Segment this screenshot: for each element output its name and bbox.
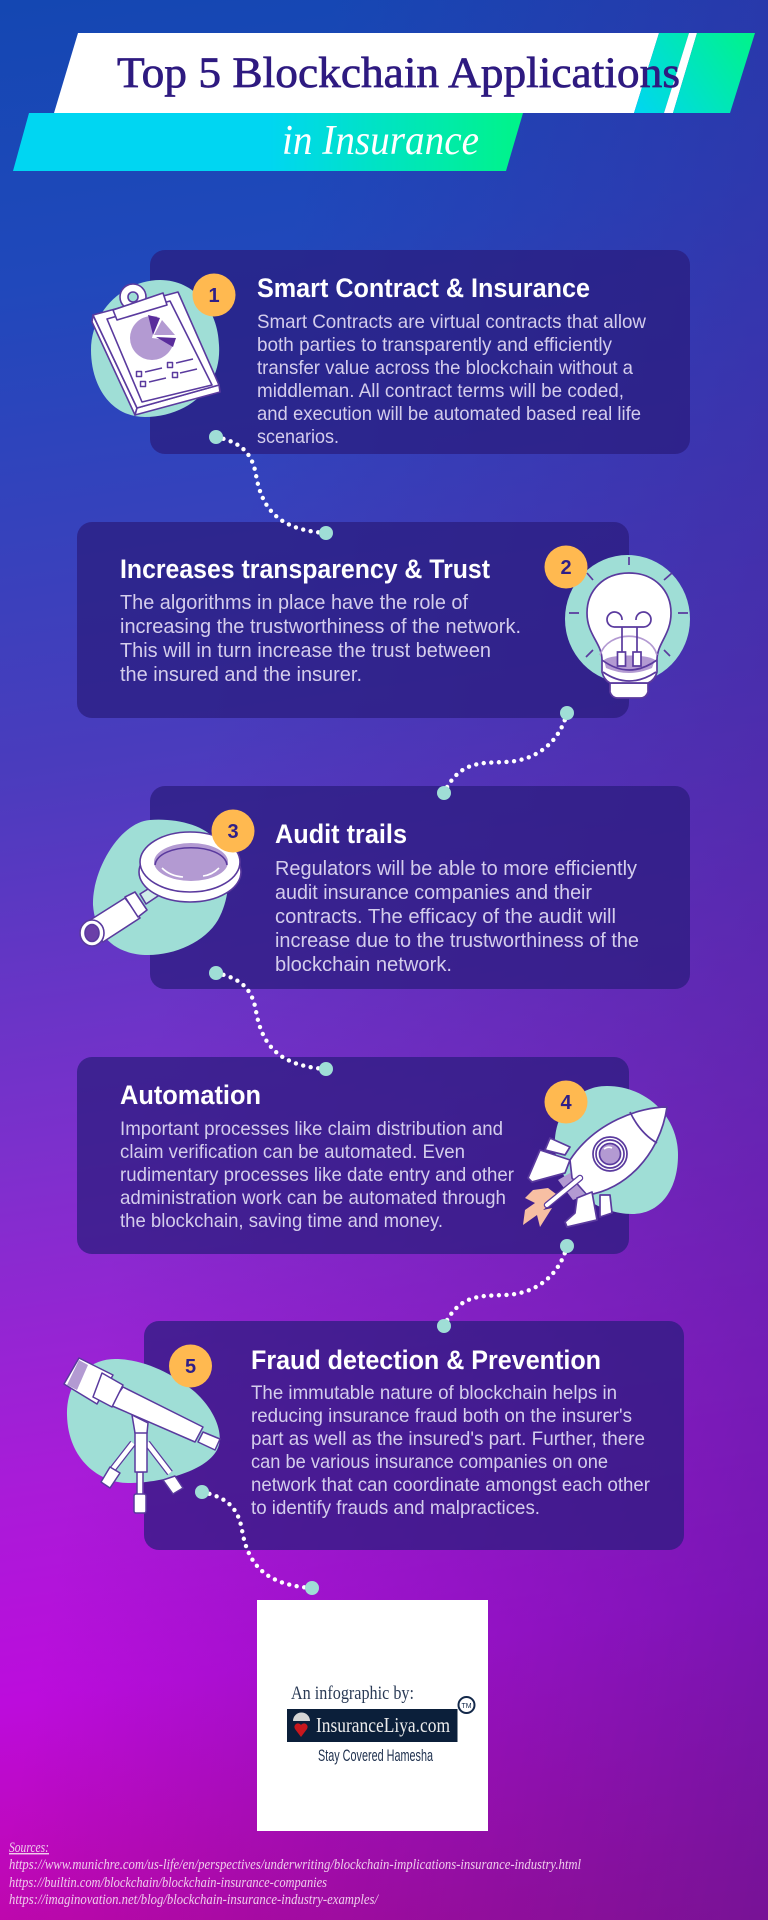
body text: increase due to the trustworthiness of the — [275, 929, 639, 952]
icon: telescope — [64, 1358, 220, 1513]
body text: the insured and the insurer. — [120, 663, 362, 686]
body text: The immutable nature of blockchain helps in — [251, 1382, 617, 1404]
icon: rocket — [523, 1086, 678, 1227]
body text — [120, 1118, 514, 1232]
badge 2: 2 — [560, 557, 572, 579]
connector 2 — [437, 706, 574, 800]
sources: Sources: — [9, 1840, 49, 1856]
sources — [9, 1840, 581, 1908]
heading: Fraud detection & Prevention — [251, 1345, 601, 1375]
body text: and execution will be automated based real life — [257, 403, 641, 425]
body text: increasing the trustworthiness of the network. — [120, 615, 521, 638]
body text: both parties to transparently and efficiently — [257, 334, 612, 356]
sources: https://builtin.com/blockchain/blockchain-insurance-companies — [9, 1875, 327, 1891]
heading: Automation — [120, 1080, 261, 1110]
sources: https://imaginovation.net/blog/blockchain-insurance-industry-examples/ — [9, 1892, 380, 1908]
connector 4 — [437, 1239, 574, 1333]
panel: logo — [257, 1600, 488, 1831]
badge 4: 4 — [560, 1092, 572, 1114]
heading: Smart Contract & Insurance — [257, 273, 590, 303]
connector 1 — [209, 430, 333, 540]
icon: clipboard — [91, 280, 220, 417]
badge 3: 3 — [227, 821, 239, 843]
badge 1: 1 — [208, 285, 220, 307]
body text: middleman. All contract terms will be coded, — [257, 380, 624, 402]
body text: The algorithms in place have the role of — [120, 591, 468, 614]
panel: fraud detection — [144, 1321, 684, 1550]
logo bar — [287, 1709, 458, 1742]
heading: Audit trails — [275, 819, 407, 849]
body text: scenarios. — [257, 426, 339, 448]
body text: claim verification can be automated. Even — [120, 1141, 465, 1163]
body text: This will in turn increase the trust between — [120, 639, 491, 662]
tagline: Stay Covered Hamesha — [318, 1746, 433, 1765]
icon: light bulb — [565, 555, 690, 698]
body text: contracts. The efficacy of the audit will — [275, 905, 616, 928]
body text — [275, 857, 639, 976]
title banner — [13, 33, 755, 171]
body text: Important processes like claim distribution and — [120, 1118, 503, 1140]
badge 1 — [192, 274, 236, 316]
body text: Regulators will be able to more efficiently — [275, 857, 638, 880]
body text: rudimentary processes like date entry and other — [120, 1164, 514, 1186]
icon: magnifying glass — [80, 820, 241, 955]
body text: part as well as the insured's part. Further, there — [251, 1428, 645, 1450]
body text: network that can coordinate amongst each other — [251, 1474, 650, 1496]
panel: audit trails — [150, 786, 690, 989]
body text — [251, 1382, 650, 1519]
body text: transfer value across the blockchain without a — [257, 357, 633, 379]
trademark mark: TM — [461, 1703, 472, 1710]
connector 3 — [209, 966, 333, 1076]
logo bar: InsuranceLiya.com — [316, 1713, 450, 1737]
body text — [120, 591, 521, 686]
heading: Increases transparency & Trust — [120, 554, 490, 584]
subtitle: in Insurance — [282, 118, 479, 164]
panel: transparency — [77, 522, 629, 718]
body text — [257, 311, 647, 448]
badge 4 — [544, 1080, 588, 1124]
panel: automation — [77, 1057, 629, 1254]
panel: smart contract — [150, 250, 690, 454]
badge 3 — [212, 810, 254, 852]
title text: Top 5 Blockchain Applications — [117, 50, 680, 97]
trademark mark — [458, 1697, 474, 1713]
body text: can be various insurance companies on one — [251, 1451, 608, 1473]
badge 2 — [544, 546, 588, 588]
byline: An infographic by: — [291, 1683, 414, 1704]
body text: to identify frauds and malpractices. — [251, 1497, 540, 1519]
body text: Smart Contracts are virtual contracts that allow — [257, 311, 647, 333]
body text: reducing insurance fraud both on the insurer's — [251, 1405, 632, 1427]
body text: audit insurance companies and their — [275, 881, 592, 904]
body text: the blockchain, saving time and money. — [120, 1210, 443, 1232]
badge 5: 5 — [185, 1356, 196, 1378]
body text: blockchain network. — [275, 953, 452, 976]
connector 5 — [195, 1485, 319, 1595]
badge 5 — [169, 1344, 212, 1388]
sources: https://www.munichre.com/us-life/en/perspectives/underwriting/blockchain-implications-insurance-industry.html — [9, 1857, 581, 1873]
body text: administration work can be automated through — [120, 1187, 506, 1209]
